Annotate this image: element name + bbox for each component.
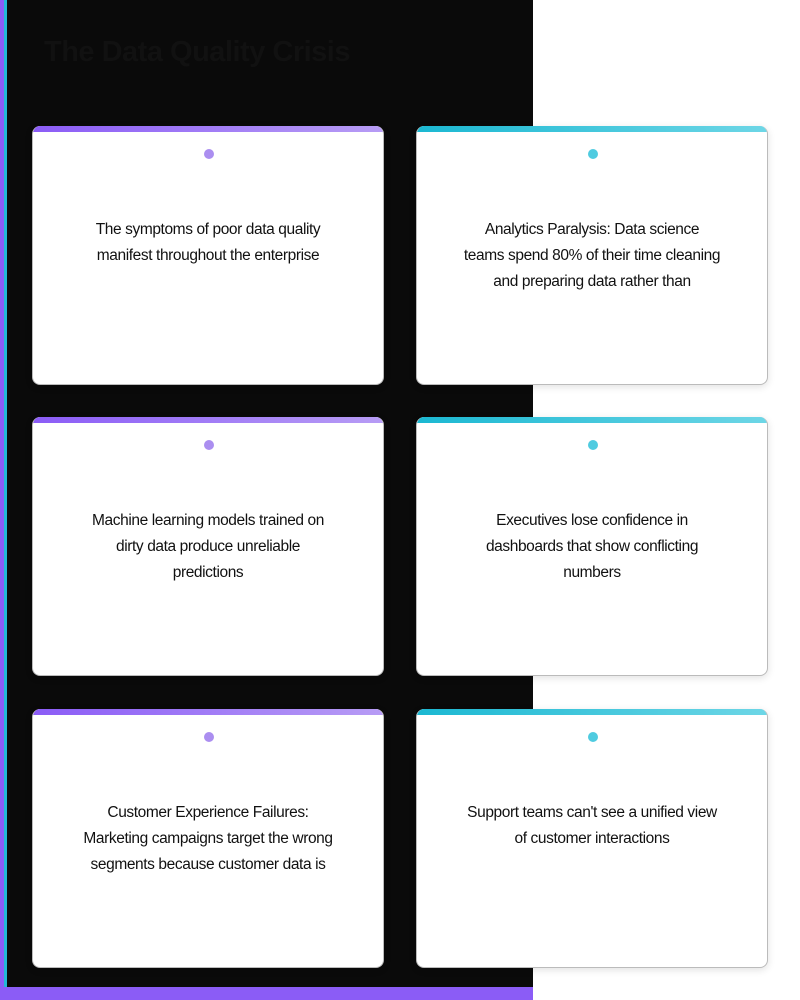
card: analytics paralysis: and preparing data rather than (493, 273, 691, 290)
card: support teams: Support teams can't see a unified view (467, 804, 717, 821)
card: analytics paralysis: Analytics Paralysis: Data science (485, 221, 699, 238)
card: support teams: of customer interactions (515, 830, 669, 847)
card: machine learning (32, 417, 384, 676)
card: customer experience: Marketing campaigns target the wrong (83, 830, 333, 847)
card: customer experience: segments because customer data is (91, 856, 325, 873)
title: The Data Quality Crisis (44, 36, 350, 68)
dark background panel (0, 0, 533, 987)
card: machine learning: predictions (173, 564, 243, 581)
card: symptoms (32, 126, 384, 385)
card: executives: numbers (563, 564, 621, 581)
card: machine learning: dirty data produce unreliable (116, 538, 300, 555)
card: analytics paralysis: teams spend 80% of their time cleaning (464, 247, 720, 264)
card: symptoms: The symptoms of poor data quality (96, 221, 320, 238)
card: support teams (416, 709, 768, 968)
card: customer experience: Customer Experience Failures: (107, 804, 309, 821)
card: machine learning: Machine learning models trained on (92, 512, 324, 529)
card: executives (416, 417, 768, 676)
card: analytics paralysis (416, 126, 768, 385)
card: customer experience (32, 709, 384, 968)
card: symptoms: manifest throughout the enterprise (97, 247, 319, 264)
card: executives: Executives lose confidence in (496, 512, 688, 529)
card: executives: dashboards that show conflicting (486, 538, 698, 555)
